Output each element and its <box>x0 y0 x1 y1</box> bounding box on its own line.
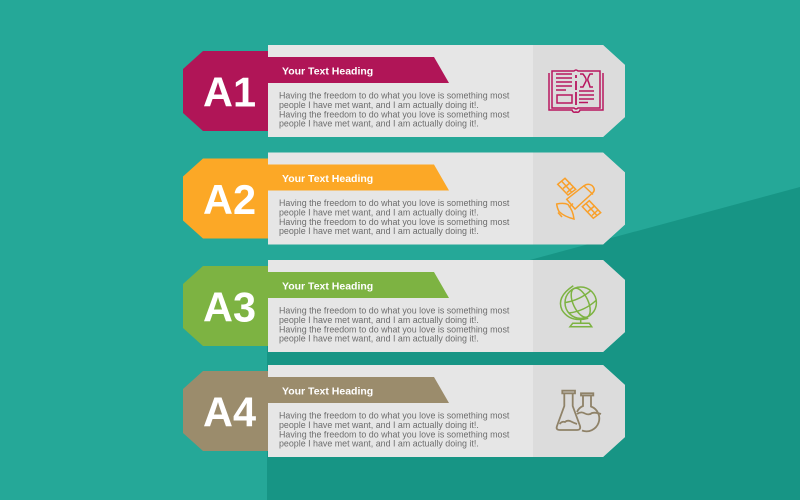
dark background shape <box>267 187 800 500</box>
label A2: A2 <box>203 176 256 223</box>
ribbon <box>268 377 449 403</box>
body text: Having the freedom to do what you love is something most <box>279 198 510 208</box>
panel: A2: people I have met want, and I am actually doing it!. <box>279 207 479 217</box>
label A1: A1 <box>203 68 256 116</box>
heading: Your Text Heading <box>282 280 373 292</box>
icon panel <box>533 260 625 352</box>
card body <box>268 365 625 457</box>
ribbon <box>268 164 449 190</box>
badge A1 <box>183 51 268 131</box>
body text: Having the freedom to do what you love is something most <box>279 306 510 316</box>
panel: A1: people I have met want, and I am actually doing it!. <box>279 100 479 110</box>
panel: A2: people I have met want, and I am actually doing it!. <box>279 226 479 236</box>
panel: A1: Having the freedom to do what you love is something most <box>279 109 510 119</box>
heading: Your Text Heading <box>282 66 373 78</box>
ribbon <box>268 272 449 298</box>
body text: Having the freedom to do what you love is something most <box>279 90 510 100</box>
icon: flasks <box>557 391 601 431</box>
icon panel <box>533 152 625 244</box>
card body <box>268 152 625 244</box>
body text: Having the freedom to do what you love is something most <box>279 410 510 420</box>
label A4: A4 <box>203 388 256 436</box>
badge A4 <box>183 371 268 451</box>
panel: A3: Having the freedom to do what you love is something most <box>279 324 510 334</box>
panel: A4: people I have met want, and I am actually doing it!. <box>279 420 479 430</box>
panel: A3: people I have met want, and I am actually doing it!. <box>279 315 479 325</box>
panel: A4 <box>183 365 625 457</box>
panel: A3 <box>183 260 625 352</box>
panel: A4: people I have met want, and I am actually doing it!. <box>279 439 479 449</box>
heading: Your Text Heading <box>282 173 373 185</box>
ribbon <box>268 57 449 83</box>
panel: A1: people I have met want, and I am actually doing it!. <box>279 119 479 129</box>
label A3: A3 <box>203 284 256 330</box>
card body <box>268 45 625 137</box>
icon panel <box>533 45 625 137</box>
panel: A2 <box>183 152 625 244</box>
panel: A3: people I have met want, and I am actually doing it!. <box>279 334 479 344</box>
badge A2 <box>183 158 268 238</box>
panel: A1 <box>183 45 625 137</box>
icon: satellite <box>557 178 601 219</box>
icon panel <box>533 365 625 457</box>
icon: book <box>549 70 603 112</box>
badge A3 <box>183 266 268 346</box>
card body <box>268 260 625 352</box>
icon: globe <box>560 285 597 327</box>
heading: Your Text Heading <box>282 386 373 398</box>
panel: A2: Having the freedom to do what you love is something most <box>279 217 510 227</box>
panel: A4: Having the freedom to do what you love is something most <box>279 429 510 439</box>
